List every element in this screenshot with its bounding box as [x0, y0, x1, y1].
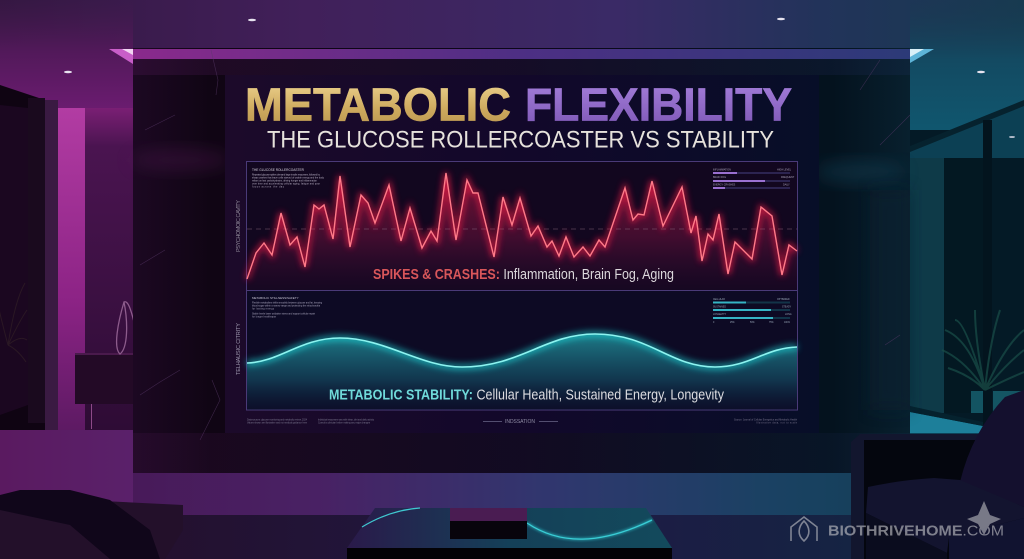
display board — [225, 75, 819, 433]
caption: metabolic stability: METABOLIC STABILITY: Cellular Health, Sustained Energy, Longevity — [329, 388, 725, 404]
legend bars: crash metrics — [713, 168, 795, 189]
panel heading and notes: Repeated glucose spikes demand large insulin responses, followed by — [252, 174, 321, 176]
panel: glucose rollercoaster — [246, 162, 798, 290]
panel heading and notes: over time and accelerating cellular aging, fatigue and poor — [252, 182, 320, 186]
plant right — [942, 310, 1024, 413]
panel heading and notes: for longer healthspan — [252, 316, 277, 318]
legend bars: stability metrics: 50% — [750, 322, 755, 324]
footer notes: Source: Journal of Cellular Energetics and Metabolic Health — [734, 418, 798, 422]
footer notes: Illustrative data, not to scale — [756, 422, 798, 424]
legend bars: crash metrics: ENERGY CRASHES — [713, 184, 736, 186]
panel heading and notes: for lasting energy — [252, 308, 275, 310]
teal area fill — [247, 334, 797, 410]
panel heading and notes: THE GLUCOSE ROLLERCOASTER — [252, 168, 305, 172]
legend bars: crash metrics: BRAIN FOG — [713, 176, 726, 179]
teal stability line — [247, 334, 797, 367]
panel heading and notes: Flexible metabolism shifts smoothly between glucose and fat, keeping — [252, 302, 323, 304]
legend bars: crash metrics: INFLAMMATION — [713, 168, 731, 172]
icon: house leaf — [791, 517, 817, 541]
legend bars: stability metrics: LONG — [785, 314, 792, 316]
red glucose line — [247, 173, 797, 279]
subtitle: THE GLUCOSE ROLLERCOASTER VS STABILITY — [267, 126, 774, 154]
legend bars: stability metrics: OPTIMIZED — [777, 299, 790, 301]
legend bars: stability metrics: SUSTAINED — [713, 306, 726, 308]
footer axis label with arrows — [483, 419, 558, 425]
watermark: BIOTHRIVEHOME.COM — [791, 501, 1004, 541]
footer notes: Data sources: glucose monitoring and metabolic review, 2024 — [247, 418, 308, 422]
panel heading and notes: reliant on fast carbohydrates, driving hunger and inflammation — [252, 180, 318, 182]
marble column — [130, 48, 910, 473]
panel heading and notes: focus across the day — [252, 186, 285, 188]
footer notes: Individual responses vary with sleep, diet and daily activity — [318, 418, 375, 422]
y-axis label: bottom: TELHAUSIC CITRITY — [236, 323, 242, 375]
panel heading and notes — [252, 296, 323, 318]
footer notes: Values shown are illustrative and not medical guidance here — [247, 422, 308, 424]
panel: metabolic stability — [246, 290, 798, 410]
right sofa — [851, 390, 1024, 559]
plant left — [0, 283, 27, 362]
panel heading and notes: Stable levels lower oxidative stress and support cellular repair — [252, 312, 315, 316]
title: FLEXIBILITY — [525, 78, 792, 130]
legend bars: crash metrics: DAILY — [783, 184, 790, 186]
legend bars: stability metrics: 25% — [730, 322, 735, 324]
y-axis label: top: PSYCHOMOIC CAVITY — [236, 200, 242, 252]
legend bars: stability metrics: 100% — [784, 322, 790, 324]
legend bars: stability metrics: LONGEVITY — [713, 314, 727, 316]
footer notes: Consult a clinician before making any major changes — [318, 422, 371, 424]
legend bars: crash metrics: HIGH LEVEL — [777, 168, 792, 172]
legend bars: stability metrics — [713, 298, 792, 324]
legend bars: stability metrics: STEADY — [782, 306, 792, 308]
ceiling light wedges — [109, 49, 934, 64]
watermark: BIOTHRIVEHOME.COM: BIOTHRIVEHOME .COM — [828, 524, 1004, 540]
legend bars: stability metrics: 0 — [713, 322, 715, 324]
panel heading and notes: METABOLIC STILLNESS/SAFETY — [252, 296, 299, 300]
panel heading and notes: sharp crashes that leave cells starved of usable energy and the body — [252, 176, 325, 180]
panel heading and notes — [252, 168, 325, 188]
ceiling downlights — [64, 18, 1015, 138]
legend bars: stability metrics: CELLULAR — [713, 298, 725, 301]
legend bars: crash metrics: FREQUENT — [781, 176, 795, 179]
title — [245, 78, 792, 130]
red area fill — [247, 173, 797, 290]
footer notes — [247, 418, 798, 424]
title: METABOLIC — [245, 78, 511, 130]
console and vase — [75, 302, 134, 429]
panel heading and notes: blood sugar within a narrow range and protecting the mitochondria — [252, 304, 321, 308]
coffee table with glowing line — [347, 508, 672, 559]
legend bars: stability metrics: 75% — [769, 322, 774, 324]
footer axis label with arrows: INDSSATION — [505, 419, 535, 425]
icon: sparkle — [967, 501, 1001, 535]
left sofa — [0, 490, 183, 559]
caption: spikes and crashes: SPIKES & CRASHES: Inflammation, Brain Fog, Aging — [373, 266, 674, 283]
